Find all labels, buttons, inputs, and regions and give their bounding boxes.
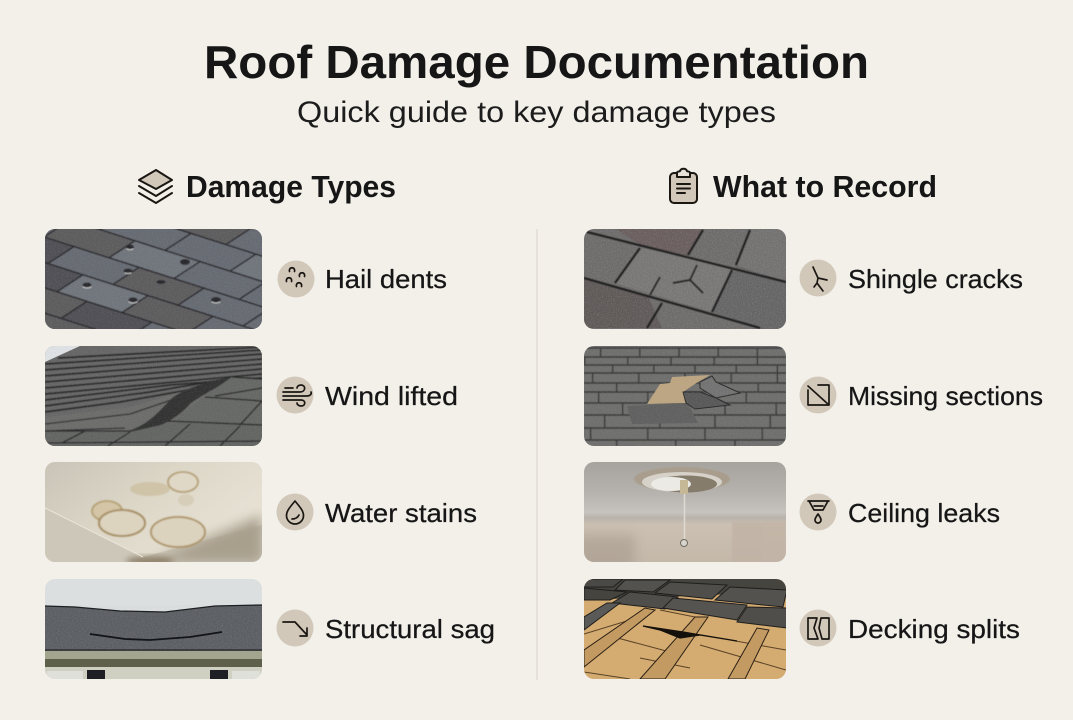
panel: damage types [45, 169, 494, 679]
icon badge: wind lifted [276, 376, 314, 414]
photo: decking splits [584, 579, 786, 679]
label: structural sag: Structural sag [325, 614, 495, 644]
label: missing sections: Missing sections [848, 381, 1043, 411]
icon badge: decking splits [800, 610, 836, 646]
title: Roof Damage Documentation [204, 36, 869, 88]
icon badge: ceiling leaks [800, 494, 836, 530]
heading: what to record: What to Record [713, 169, 937, 204]
heading: damage types: Damage Types [186, 169, 396, 204]
icon: layers [139, 170, 172, 203]
icon badge: missing sections [800, 376, 836, 414]
label: decking splits: Decking splits [848, 614, 1020, 644]
label: hail dents: Hail dents [325, 264, 447, 294]
icon badge: structural sag [276, 610, 314, 646]
icon badge: water stains [276, 494, 314, 530]
photo: hail dents [45, 229, 262, 329]
label: water stains: Water stains [325, 498, 477, 528]
icon badge: shingle cracks [800, 260, 836, 296]
divider [536, 229, 538, 680]
label: wind lifted: Wind lifted [325, 381, 458, 411]
label: shingle cracks: Shingle cracks [848, 264, 1023, 294]
photo: shingle cracks [584, 229, 786, 329]
photo: structural sag [45, 579, 262, 679]
photo: wind lifted [45, 346, 262, 446]
icon badge: hail dents [278, 260, 314, 298]
icon: clipboard [670, 169, 697, 203]
photo: missing sections [584, 346, 786, 446]
photo: ceiling leaks [584, 462, 786, 562]
label: ceiling leaks: Ceiling leaks [848, 498, 1000, 528]
panel: what to record [575, 169, 1043, 679]
subtitle: Quick guide to key damage types [297, 96, 776, 129]
photo: water stains [45, 462, 262, 562]
